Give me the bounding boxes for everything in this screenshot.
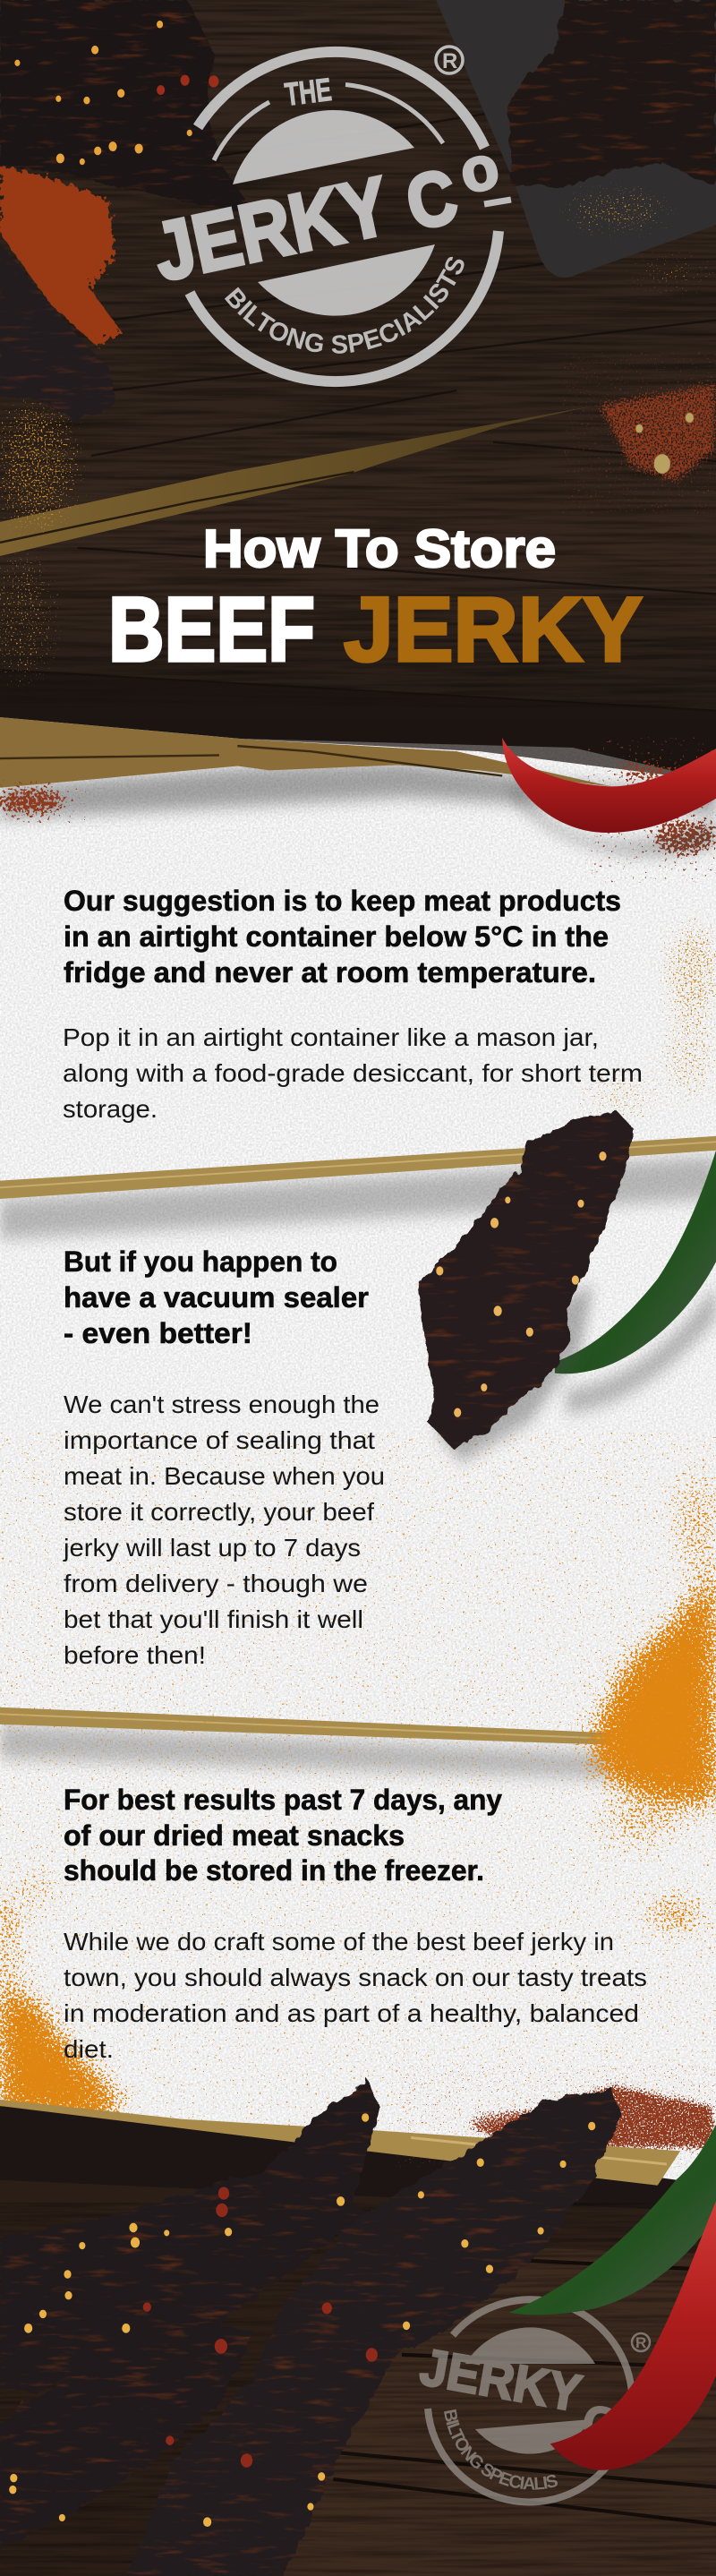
title: JERKY <box>344 578 643 680</box>
wood backdrop <box>0 0 716 781</box>
letters the: THE <box>283 71 334 113</box>
heading: vacuum sealer: - even better! <box>64 1317 252 1349</box>
text block: moderation: town, you should always snack on our tasty treats <box>64 1964 647 1991</box>
turmeric powder right <box>592 1468 716 1924</box>
small logo disc top <box>465 2327 595 2364</box>
small logo ring <box>428 2299 632 2502</box>
jerky strip bottom lower left <box>0 2317 256 2551</box>
jerky strip bottom left <box>0 2079 379 2392</box>
panel: hero header <box>0 0 716 883</box>
jerky on slate <box>507 0 716 187</box>
bottom wood backdrop <box>0 2106 716 2576</box>
text block: moderation: While we do craft some of the best beef jerky in <box>64 1928 614 1956</box>
inner disc bottom <box>258 244 435 316</box>
inner disc top <box>233 110 414 184</box>
heading: airtight container: in an airtight container below 5°C in the <box>64 920 609 953</box>
small logo <box>416 2296 652 2505</box>
text block: sealing: meat in. Because when you <box>64 1462 385 1490</box>
red chili top <box>502 738 716 855</box>
registered mark <box>436 47 463 73</box>
text block: sealing: before then! <box>64 1641 206 1669</box>
diagonal wood strip <box>0 406 593 556</box>
bottom wood strip <box>0 2100 680 2186</box>
letters co: o <box>454 133 505 207</box>
letters jerky: JERKY <box>146 160 396 299</box>
small logo tagline: BILTONG SPECIALIS <box>444 2409 558 2490</box>
heading: vacuum sealer <box>64 1245 369 1349</box>
text block: mason jar: Pop it in an airtight container like a mason jar, <box>63 1023 599 1051</box>
text block: mason jar: along with a food-grade desiccant, for short term <box>63 1059 643 1087</box>
letters biltong specialists: BILTONG SPECIALISTS <box>224 256 464 354</box>
wooden stick divider upper <box>0 1136 716 1239</box>
title: How To Store <box>203 519 556 578</box>
jerky left lower <box>0 244 116 421</box>
panel: bottom wood section <box>0 2066 716 2576</box>
logo: the jerky co <box>146 45 512 387</box>
heading: airtight container <box>64 885 621 988</box>
green chili middle <box>555 1151 716 1413</box>
red chili bottom <box>550 2201 716 2470</box>
text block: sealing: bet that you'll finish it well <box>64 1605 363 1633</box>
ring arcs <box>190 52 499 381</box>
text block: mason jar <box>63 1023 643 1123</box>
jerky top left <box>0 0 256 214</box>
text block: sealing <box>63 1391 385 1669</box>
flake pieces <box>635 413 694 474</box>
slate board <box>436 0 716 278</box>
text block: moderation: in moderation and as part of a healthy, balanced <box>64 1999 639 2027</box>
heading: freezer: For best results past 7 days, any <box>64 1784 502 1816</box>
heading: freezer: of our dried meat snacks <box>64 1819 405 1852</box>
small logo co: Co <box>578 2395 651 2459</box>
heading: airtight container: fridge and never at room temperature. <box>64 956 596 988</box>
small logo registered: R <box>635 2334 646 2351</box>
wood grain <box>0 2203 716 2576</box>
small logo disc bottom <box>475 2419 591 2454</box>
shadow under wood <box>0 762 716 819</box>
flakes below chili <box>616 765 716 855</box>
green chili bottom <box>509 2125 716 2315</box>
letters co: C <box>399 153 465 247</box>
text block: sealing: We can't stress enough the <box>64 1391 379 1418</box>
jerky strip bottom right <box>128 2087 621 2576</box>
heading: vacuum sealer: have a vacuum sealer <box>64 1281 369 1314</box>
heading: airtight container: Our suggestion is to keep meat products <box>64 885 621 917</box>
text block: sealing: jerky will last up to 7 days <box>63 1534 361 1562</box>
lower wood strip <box>0 717 612 788</box>
panel: storage text section <box>0 885 716 2118</box>
turmeric powder left <box>0 1880 121 2118</box>
small logo wordmark: JERKY <box>416 2338 585 2423</box>
spice specks top right <box>577 922 716 1120</box>
paprika bottom right <box>471 2084 716 2148</box>
title <box>108 519 643 680</box>
spice specks on slate and wood <box>0 196 712 680</box>
jerky strip middle <box>418 1110 635 1461</box>
text block: moderation: diet. <box>64 2035 114 2063</box>
text block: sealing: store it correctly, your beef <box>64 1498 374 1526</box>
heading: freezer: should be stored in the freezer. <box>64 1854 484 1887</box>
text block: sealing: from delivery - though we <box>64 1570 368 1597</box>
text block: moderation <box>64 1928 647 2063</box>
heading: freezer <box>64 1784 502 1887</box>
letters co <box>399 133 511 247</box>
flake grain <box>598 382 716 483</box>
chili flakes on jerky <box>9 2113 595 2527</box>
small logo registered <box>632 2333 650 2351</box>
heading: vacuum sealer: But if you happen to <box>64 1245 337 1278</box>
registered mark: R <box>442 49 457 73</box>
text block: mason jar: storage. <box>63 1095 158 1123</box>
title: BEEF <box>108 578 315 680</box>
wooden stick divider lower <box>0 1707 612 1778</box>
chili flakes upper right <box>598 382 716 483</box>
paprika powder <box>0 166 121 347</box>
crumbs left <box>0 788 65 815</box>
text block: sealing: importance of sealing that <box>64 1426 375 1454</box>
